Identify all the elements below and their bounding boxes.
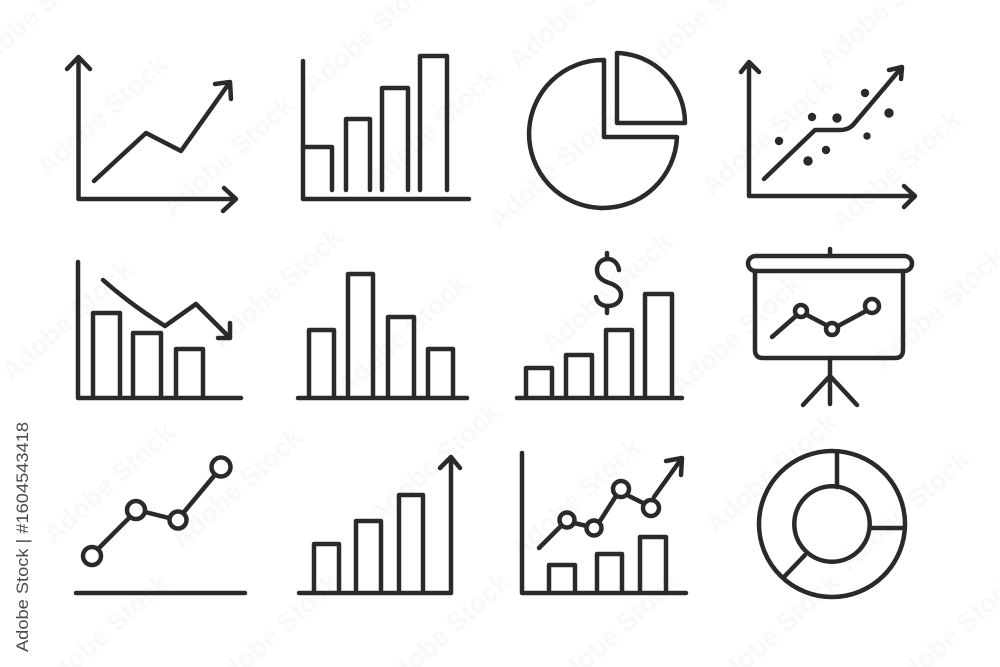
icon: falling bars with down arrow <box>78 262 241 398</box>
watermark pattern: Adobe Stock <box>361 61 504 195</box>
watermark pattern: Adobe Stock <box>825 103 968 237</box>
watermark pattern: Adobe Stock <box>331 268 474 402</box>
watermark pattern: Adobe Stock <box>157 89 300 223</box>
side credit text: Adobe Stock | #1604543418 <box>13 422 32 652</box>
watermark pattern: Adobe Stock <box>363 396 506 530</box>
watermark pattern: Adobe Stock <box>206 221 349 355</box>
watermark pattern: Adobe Stock <box>38 416 181 550</box>
icon: four bar chart <box>298 274 467 398</box>
icon: scatter plot with trend arrow <box>741 62 915 207</box>
icon: pie chart with separated slice <box>529 53 685 208</box>
icon: presentation board with line chart <box>748 249 912 405</box>
watermark pattern: Adobe Stock <box>696 68 839 202</box>
watermark pattern: Adobe Stock <box>665 268 808 402</box>
watermark pattern: Adobe Stock <box>483 101 626 235</box>
icon: segmented donut chart <box>759 451 905 597</box>
watermark pattern: Adobe Stock <box>536 226 679 360</box>
icon: rising bars with up arrow <box>299 457 460 593</box>
watermark pattern: Adobe Stock <box>166 421 309 555</box>
icon: connected dot line chart <box>76 458 245 593</box>
icon: bars with dotted trend line and arrow <box>522 453 686 593</box>
watermark pattern: Adobe Stock <box>700 406 843 540</box>
icon: rising line chart with axes <box>67 57 236 211</box>
watermark pattern: Adobe Stock <box>505 431 648 565</box>
icon: bar chart with dollar sign <box>517 253 682 398</box>
watermark pattern: Adobe Stock <box>833 443 976 577</box>
watermark pattern: Adobe Stock <box>31 48 174 182</box>
icon: ascending bar chart on axes <box>303 56 469 199</box>
